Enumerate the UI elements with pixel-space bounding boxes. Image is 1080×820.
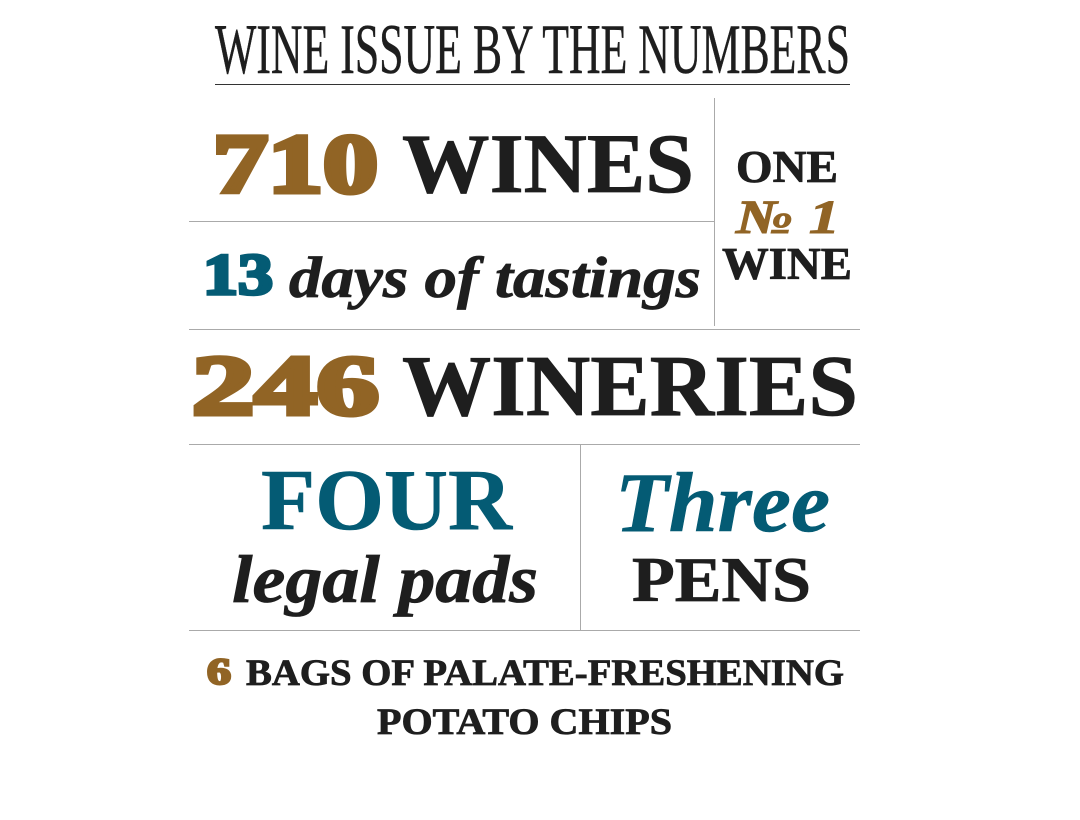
- stat: 710 wines: 710: [213, 118, 378, 211]
- stat: 13 days of tastings: days of tastings: [289, 245, 701, 310]
- stat: four legal pads: FOUR: [261, 451, 513, 548]
- stat: four legal pads: [232, 451, 538, 617]
- stat: 246 wineries: WINERIES: [402, 337, 858, 434]
- stat: 6 bags of potato chips: BAGS OF PALATE-FRESHENING: [246, 653, 844, 694]
- stat: four legal pads: legal pads: [232, 541, 538, 617]
- stat: three pens: [615, 456, 830, 615]
- stat: 6 bags of potato chips: 6: [207, 652, 231, 693]
- stat: 246 wineries: [192, 337, 858, 434]
- stat: 710 wines: WINES: [402, 117, 694, 211]
- stat: 6 bags of potato chips: POTATO CHIPS: [377, 702, 672, 743]
- stat: 13 days of tastings: 13: [203, 242, 273, 307]
- stat: 6 bags of potato chips: [207, 652, 844, 743]
- stat: 710 wines: [213, 117, 694, 211]
- stat: one No 1 wine: WINE: [722, 239, 852, 289]
- stat: three pens: Three: [615, 456, 830, 550]
- stat: 246 wineries: 246: [192, 339, 379, 433]
- stat: one No 1 wine: ONE: [736, 142, 838, 192]
- stat: one No 1 wine: [722, 142, 852, 289]
- stat: one No 1 wine: № 1: [735, 191, 840, 244]
- stat: three pens: PENS: [632, 544, 811, 615]
